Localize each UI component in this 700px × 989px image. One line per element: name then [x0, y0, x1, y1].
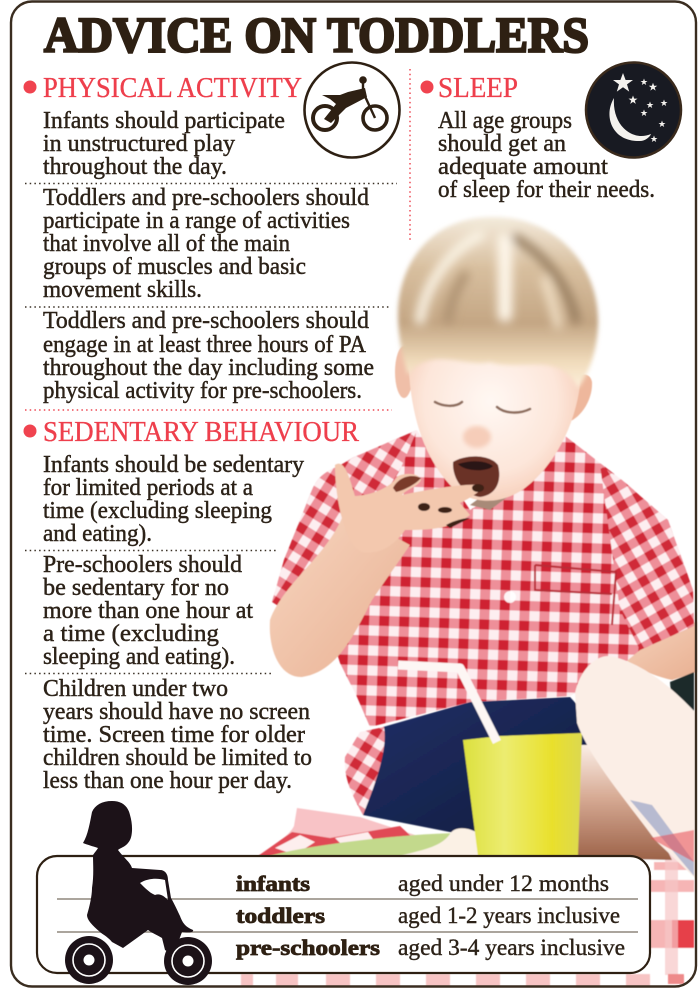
text: three hours of PA: Toddlers and pre-schoolers should — [43, 308, 369, 334]
text: infants sedentary: for limited periods at a — [43, 475, 253, 501]
hand — [335, 464, 482, 553]
shirt button — [504, 591, 516, 603]
row: infants: infants — [236, 871, 311, 896]
text: infants: Infants should participate — [43, 108, 285, 134]
text: three hours of PA: engage in at least three hours of PA — [43, 332, 367, 358]
photo: toddler eating chocolate — [241, 217, 697, 986]
text: screen time: less than one hour per day. — [43, 768, 292, 794]
text: infants: throughout the day. — [43, 154, 227, 180]
shirt body — [272, 430, 694, 727]
text: muscles and movement: movement skills. — [43, 277, 202, 303]
text: infants — [43, 108, 285, 180]
text: three hours of PA: throughout the day including some — [43, 355, 374, 381]
text: pre-schoolers sedentary: more than one hour at — [43, 598, 253, 624]
text: muscles and movement: that involve all of the main — [43, 231, 290, 257]
jeans — [363, 697, 600, 840]
text: three hours of PA — [43, 308, 374, 404]
panel: sedentary behaviour — [24, 417, 359, 794]
text: screen time — [43, 676, 312, 794]
nose — [463, 426, 491, 448]
eyes — [435, 402, 530, 413]
text: infants: in unstructured play — [43, 131, 235, 157]
row: infants — [236, 871, 609, 897]
neck shadow — [470, 440, 555, 510]
right sleeve — [600, 465, 694, 650]
row: toddlers: aged 1-2 years inclusive — [398, 903, 620, 929]
food crumbs — [400, 828, 485, 856]
heading: sedentary behaviour: SEDENTARY BEHAVIOUR — [43, 417, 359, 448]
text: sleep advice: adequate amount — [438, 154, 608, 180]
text: screen time: children should be limited to — [43, 745, 312, 771]
text: sleep advice — [438, 108, 655, 203]
bullet — [24, 424, 36, 438]
text: pre-schoolers sedentary — [43, 552, 253, 670]
face — [408, 320, 580, 501]
text: infants sedentary — [43, 452, 304, 547]
text: muscles and movement: Toddlers and pre-schoolers should — [43, 185, 369, 211]
text: pre-schoolers sedentary: Pre-schoolers should — [43, 552, 242, 578]
row: pre-schoolers: aged 3-4 years inclusive — [398, 935, 625, 961]
text: pre-schoolers sedentary: sleeping and eating). — [43, 644, 235, 670]
ears — [395, 346, 413, 398]
title: ADVICE ON TODDLERS — [44, 6, 589, 62]
chocolate on fingers — [393, 476, 484, 528]
text: muscles and movement: participate in a range of activities — [43, 208, 350, 234]
hair — [398, 217, 598, 388]
bullet — [24, 80, 36, 94]
text: screen time: time. Screen time for older — [43, 722, 305, 748]
text: screen time: years should have no screen — [43, 699, 310, 725]
row: toddlers — [236, 903, 620, 929]
pink under plate — [578, 745, 672, 860]
panel: sleep — [420, 62, 681, 203]
row: pre-schoolers: pre-schoolers — [236, 935, 380, 960]
shirt pocket — [535, 565, 616, 625]
row: infants: aged under 12 months — [398, 871, 609, 897]
heading: sleep: SLEEP — [438, 73, 518, 104]
shirt tail — [345, 727, 385, 815]
bullet — [420, 80, 434, 94]
icon: balance bike — [304, 62, 400, 158]
text: infants sedentary: and eating). — [43, 521, 152, 547]
text: screen time: Children under two — [43, 676, 228, 702]
text: sleep advice: of sleep for their needs. — [438, 177, 655, 203]
tablecloth edge — [630, 800, 694, 876]
yellow cup — [463, 733, 582, 856]
panel: physical activity — [24, 62, 400, 404]
text: infants sedentary: Infants should be sedentary — [43, 452, 304, 478]
right arm — [605, 622, 697, 680]
text: muscles and movement: groups of muscles and basic — [43, 254, 306, 280]
icon: moon and stars — [586, 62, 681, 158]
text: pre-schoolers sedentary: be sedentary for no — [43, 575, 229, 601]
tablecloth left pile — [258, 808, 420, 856]
tablecloth right side — [600, 850, 694, 975]
hair streaks — [420, 235, 576, 325]
text: infants sedentary: time (excluding sleeping — [43, 498, 272, 524]
left sleeve — [272, 430, 417, 620]
panel: age definitions — [37, 856, 650, 973]
tablecloth strip under the age panel — [241, 974, 684, 986]
text: muscles and movement — [43, 185, 369, 303]
straw — [398, 665, 497, 742]
heading: physical activity: PHYSICAL ACTIVITY — [43, 73, 302, 104]
paper plate — [575, 656, 695, 878]
text: sleep advice: should get an — [438, 131, 566, 157]
left arm — [270, 510, 410, 677]
icon: child on tricycle silhouette — [65, 801, 212, 985]
text: three hours of PA: physical activity for pre-schoolers. — [43, 378, 362, 404]
text: pre-schoolers sedentary: a time (excluding — [43, 621, 219, 647]
mouth with chocolate — [453, 456, 499, 497]
text: sleep advice: All age groups — [438, 108, 572, 134]
row: toddlers: toddlers — [236, 903, 326, 928]
row: pre-schoolers — [236, 935, 625, 961]
green plate — [268, 833, 470, 856]
